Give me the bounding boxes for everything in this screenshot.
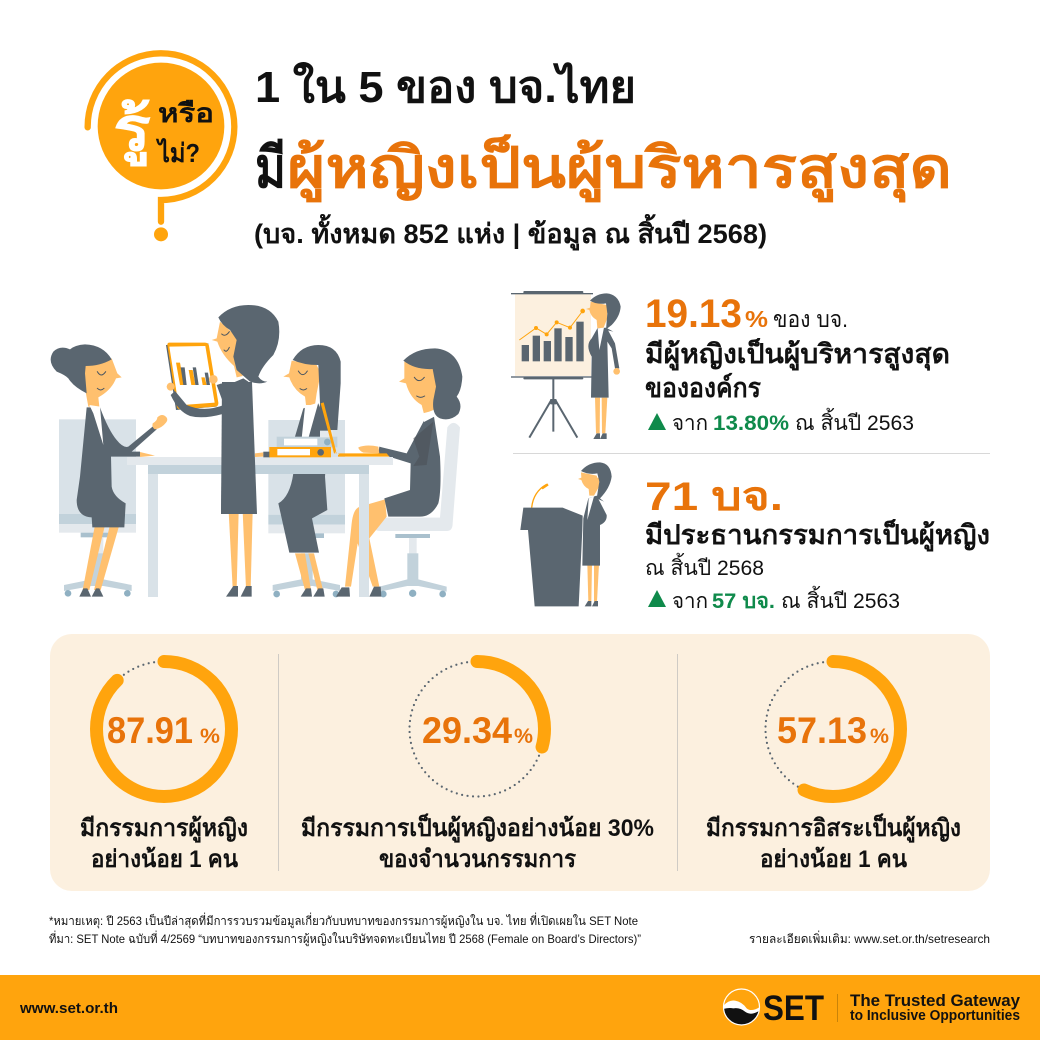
title line 1: 1 ใน 5 ของ บจ.ไทย [255, 61, 636, 112]
icon: question mark badge [88, 53, 234, 241]
donut 29.34%: 29.34 [422, 710, 512, 751]
label column 2 [301, 813, 654, 873]
label column 2: มีกรรมการเป็นผู้หญิงอย่างน้อย 30% [301, 813, 654, 843]
footnotes: *หมายเหตุ: ปี 2563 เป็นปีล่าสุดที่มีการรวบรวมข้อมูลเกี่ยวกับบทบาทของกรรมการผู้หญิงใน บจ. ไทย ที่เปิดเผยใน SET Note [49, 912, 638, 929]
panel: statistics [50, 634, 990, 891]
text: 19.13%: จาก [672, 412, 708, 435]
title line 2: ผู้หญิงเป็นผู้บริหารสูงสุด [287, 133, 952, 203]
woman typing at right with chair [336, 348, 462, 597]
text: 19.13%: ขององค์กร [645, 372, 761, 403]
text: 19.13%: 19.13 [645, 292, 742, 336]
donut 87.91%: % [200, 725, 220, 748]
footnotes: ที่มา: SET Note ฉบับที่ 4/2569 “บทบาทของกรรมการผู้หญิงในบริษัทจดทะเบียนไทย ปี 2568 (Female on Board’s Directors)” [49, 930, 641, 947]
footnotes: รายละเอียดเพิ่มเติม: www.set.or.th/setresearch [749, 930, 990, 946]
text: 19.13%: ณ สิ้นปี 2563 [795, 408, 914, 435]
label column 1: มีกรรมการผู้หญิง [80, 815, 248, 843]
icon: question mark badge: หรือ [158, 98, 214, 128]
text: 19.13%: มีผู้หญิงเป็นผู้บริหารสูงสุด [645, 336, 950, 371]
tablet and standing woman [166, 305, 279, 597]
SET logo [722, 989, 1021, 1028]
SET logo: SET [763, 989, 824, 1028]
icon: question mark badge: รู้ [113, 96, 151, 167]
label column 3: มีกรรมการอิสระเป็นผู้หญิง [706, 813, 961, 843]
label column 1 [80, 815, 248, 873]
title line 2: มี [255, 136, 286, 199]
donut 29.34%: % [514, 725, 533, 748]
meeting table [127, 457, 393, 597]
label column 3 [706, 813, 961, 873]
donut 87.91%: 87.91 [107, 710, 193, 751]
SET logo: to Inclusive Opportunities [850, 1008, 1020, 1024]
text: 71 companies: ณ สิ้นปี 2563 [781, 586, 900, 613]
footer bar: www.set.or.th [19, 1000, 118, 1017]
illustration: women at meeting table [51, 305, 462, 597]
text: 19.13%: % [745, 306, 768, 332]
text: 71 companies: 71 บจ. [645, 475, 783, 519]
SET logo: The Trusted Gateway [850, 992, 1021, 1010]
donut 57.13% [766, 662, 900, 796]
text: 19.13% [645, 292, 950, 435]
left chair [59, 419, 136, 597]
donut 57.13%: 57.13 [777, 710, 867, 751]
subtitle: (บจ. ทั้งหมด 852 แห่ง | ข้อมูล ณ สิ้นปี 2568) [254, 213, 767, 251]
icon: question mark badge: ไม่? [155, 137, 200, 168]
text: 71 companies [645, 475, 990, 613]
text: 71 companies: มีประธานกรรมการเป็นผู้หญิง [645, 517, 990, 552]
text: 71 companies: จาก [672, 590, 708, 613]
icon: presenter with chart [511, 291, 621, 439]
dress over table [221, 382, 257, 514]
text: 71 companies: ณ สิ้นปี 2568 [645, 553, 764, 580]
footnotes [49, 912, 990, 947]
binders and laptop [255, 402, 389, 457]
donut 57.13%: % [870, 725, 889, 748]
text: 19.13%: 13.80% [713, 412, 789, 435]
text: 19.13%: ของ บจ. [773, 306, 848, 332]
donut 29.34% [410, 662, 544, 796]
footer bar [0, 975, 1040, 1040]
woman seated left [51, 344, 167, 597]
donut 87.91% [96, 662, 232, 796]
icon: woman at podium [520, 462, 612, 606]
woman seated behind table [268, 345, 345, 597]
label column 3: อย่างน้อย 1 คน [760, 846, 908, 873]
text: 71 companies: 57 บจ. [712, 590, 775, 613]
label column 2: ของจำนวนกรรมการ [379, 846, 576, 873]
label column 1: อย่างน้อย 1 คน [91, 846, 239, 873]
